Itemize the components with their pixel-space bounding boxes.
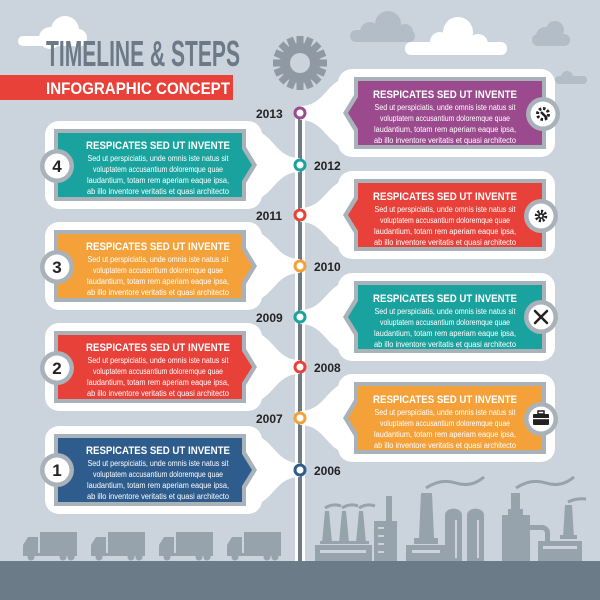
step 3 card: voluptatem accusantium doloremque quae xyxy=(93,266,223,275)
card 2007 orange: voluptatem accusantium doloremque quae xyxy=(380,419,510,428)
card 2007 orange xyxy=(338,374,558,462)
year labels: 2007 xyxy=(256,412,283,426)
step 3 card: laudantium, totam rem aperiam eaque ipsa, xyxy=(87,277,229,286)
card 2013 purple: ab illo inventore veritatis et quasi architecto xyxy=(374,136,517,145)
year labels: 2013 xyxy=(256,107,283,121)
step 4 card: 4 xyxy=(52,157,62,176)
step 1 card: ab illo inventore veritatis et quasi architecto xyxy=(87,492,230,501)
step 2 card: ab illo inventore veritatis et quasi architecto xyxy=(87,389,230,398)
step 1 card xyxy=(40,426,262,514)
title: TIMELINE & STEPS xyxy=(46,33,240,74)
year labels: 2008 xyxy=(314,361,341,375)
year labels: 2010 xyxy=(314,260,341,274)
gear xyxy=(273,36,327,90)
step 4 card: ab illo inventore veritatis et quasi architecto xyxy=(87,187,230,196)
card 2011 red xyxy=(338,171,558,259)
year labels: 2009 xyxy=(256,311,283,325)
card 2007 orange: laudantium, totam rem aperiam eaque ipsa, xyxy=(374,430,516,439)
step 2 card: RESPICATES SED UT INVENTE xyxy=(86,342,230,354)
card 2011 red: ab illo inventore veritatis et quasi architecto xyxy=(374,238,517,247)
step 2 card: 2 xyxy=(52,359,62,378)
trucks xyxy=(23,532,281,560)
step 1 card: laudantium, totam rem aperiam eaque ipsa, xyxy=(87,481,229,490)
card 2013 purple xyxy=(338,69,560,157)
card 2013 purple: laudantium, totam rem aperiam eaque ipsa, xyxy=(374,125,516,134)
card 2009 teal: laudantium, totam rem aperiam eaque ipsa, xyxy=(374,329,516,338)
step 3 card: RESPICATES SED UT INVENTE xyxy=(86,241,230,253)
step 4 card: voluptatem accusantium doloremque quae xyxy=(93,165,223,174)
year labels xyxy=(256,107,341,478)
year labels: 2012 xyxy=(314,159,341,173)
card 2009 teal: RESPICATES SED UT INVENTE xyxy=(373,293,517,305)
factories xyxy=(315,477,586,561)
card 2009 teal xyxy=(338,273,558,361)
step 3 card: 3 xyxy=(52,258,62,277)
timeline dots xyxy=(295,108,305,475)
clouds xyxy=(18,11,587,84)
connectors xyxy=(240,75,360,508)
card 2011 red: voluptatem accusantium doloremque quae xyxy=(380,216,510,225)
card 2013 purple: Sed ut perspiciatis, unde omnis iste natus sit xyxy=(374,103,516,112)
card 2007 orange: Sed ut perspiciatis, unde omnis iste natus sit xyxy=(374,408,516,417)
step 2 card: laudantium, totam rem aperiam eaque ipsa, xyxy=(87,378,229,387)
step 4 card xyxy=(40,121,262,209)
card 2007 orange: ab illo inventore veritatis et quasi architecto xyxy=(374,441,517,450)
card 2011 red: laudantium, totam rem aperiam eaque ipsa, xyxy=(374,227,516,236)
step 3 card: Sed ut perspiciatis, unde omnis iste natus sit xyxy=(88,255,229,264)
card 2009 teal: Sed ut perspiciatis, unde omnis iste natus sit xyxy=(374,307,516,316)
step 4 card: Sed ut perspiciatis, unde omnis iste natus sit xyxy=(88,154,229,163)
step 1 card: RESPICATES SED UT INVENTE xyxy=(86,445,230,457)
step 1 card: Sed ut perspiciatis, unde omnis iste natus sit xyxy=(88,459,229,468)
card 2013 purple: voluptatem accusantium doloremque quae xyxy=(380,114,510,123)
step 2 card xyxy=(40,323,262,411)
year labels: 2011 xyxy=(256,209,282,223)
card 2007 orange: RESPICATES SED UT INVENTE xyxy=(373,394,517,406)
subtitle banner xyxy=(0,75,233,100)
step 1 card: voluptatem accusantium doloremque quae xyxy=(93,470,223,479)
card 2013 purple: RESPICATES SED UT INVENTE xyxy=(373,89,517,101)
step 3 card xyxy=(40,222,262,310)
card 2009 teal: ab illo inventore veritatis et quasi architecto xyxy=(374,340,517,349)
step 4 card: laudantium, totam rem aperiam eaque ipsa, xyxy=(87,176,229,185)
step 3 card: ab illo inventore veritatis et quasi architecto xyxy=(87,288,230,297)
ground xyxy=(0,561,600,600)
year labels: 2006 xyxy=(314,464,341,478)
step 1 card: 1 xyxy=(52,461,62,480)
card 2011 red: Sed ut perspiciatis, unde omnis iste natus sit xyxy=(374,205,516,214)
step 2 card: voluptatem accusantium doloremque quae xyxy=(93,367,223,376)
step 2 card: Sed ut perspiciatis, unde omnis iste natus sit xyxy=(88,356,229,365)
subtitle banner: INFOGRAPHIC CONCEPT xyxy=(46,80,230,98)
card 2011 red: RESPICATES SED UT INVENTE xyxy=(373,191,517,203)
step 4 card: RESPICATES SED UT INVENTE xyxy=(86,140,230,152)
card 2009 teal: voluptatem accusantium doloremque quae xyxy=(380,318,510,327)
timeline axis xyxy=(295,113,305,561)
